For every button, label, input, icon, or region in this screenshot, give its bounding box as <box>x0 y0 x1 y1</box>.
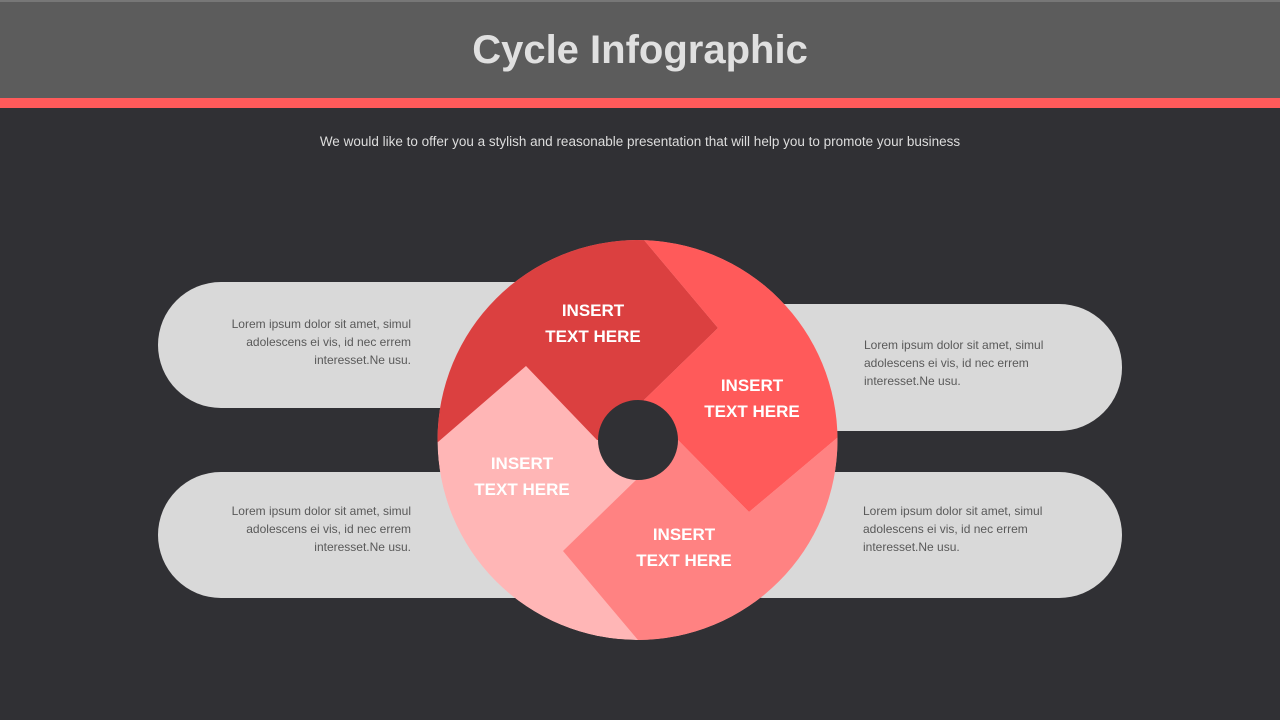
pill: top right: interesset.Ne usu. <box>864 374 961 388</box>
segment: light pink <box>438 240 838 640</box>
pill: bottom left: interesset.Ne usu. <box>314 540 411 554</box>
label: segment 2: INSERT <box>721 376 783 395</box>
cycle diagram <box>438 240 838 640</box>
header bar <box>0 0 1280 98</box>
pill: top left: adolescens ei vis, id nec errem <box>246 335 411 349</box>
pill: bottom right: adolescens ei vis, id nec errem <box>863 522 1028 536</box>
pill: top left <box>158 282 578 408</box>
segment: red <box>644 240 838 512</box>
label: segment 3: TEXT HERE <box>636 551 732 570</box>
title: Cycle Infographic <box>472 28 808 72</box>
label: segment 1: TEXT HERE <box>545 327 641 346</box>
pill: bottom left: adolescens ei vis, id nec errem <box>246 522 411 536</box>
pill: bottom left: Lorem ipsum dolor sit amet, simul <box>232 504 411 518</box>
pill: top right: adolescens ei vis, id nec errem <box>864 356 1029 370</box>
segment: dark red <box>438 240 718 442</box>
pill: top left: Lorem ipsum dolor sit amet, simul <box>232 317 411 331</box>
red accent band <box>0 98 1280 108</box>
pill: bottom right: interesset.Ne usu. <box>863 540 960 554</box>
subtitle: We would like to offer you a stylish and reasonable presentation that will help you to promote your business <box>320 134 960 149</box>
pill: top right <box>700 304 1122 431</box>
label: segment 3: INSERT <box>653 525 715 544</box>
segment: salmon <box>563 438 838 640</box>
label: segment 1: INSERT <box>562 301 624 320</box>
center hole <box>598 400 678 480</box>
pill: top left: interesset.Ne usu. <box>314 353 411 367</box>
pill: bottom right <box>700 472 1122 598</box>
pill: bottom right: Lorem ipsum dolor sit amet, simul <box>863 504 1042 518</box>
pill: bottom left <box>158 472 578 598</box>
label: segment 2: TEXT HERE <box>704 402 800 421</box>
pill: top right: Lorem ipsum dolor sit amet, simul <box>864 338 1043 352</box>
label: segment 4: TEXT HERE <box>474 480 570 499</box>
label: segment 4: INSERT <box>491 454 553 473</box>
